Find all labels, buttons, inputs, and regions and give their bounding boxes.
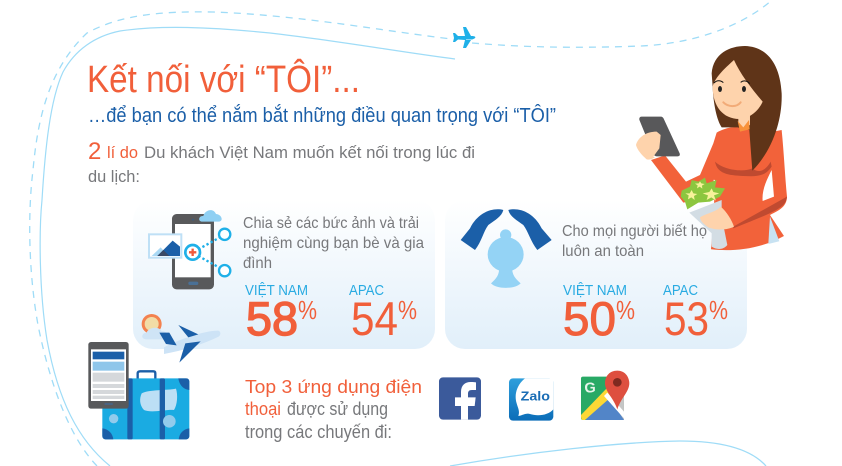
icon: suitcase with tablet (88, 342, 189, 439)
description: share photos: đình (243, 255, 272, 272)
intro text: two reasons: Du khách Việt Nam muốn kết nối trong lúc đi (144, 143, 475, 162)
phone (639, 117, 680, 156)
icon: phone with sharing nodes (149, 210, 230, 289)
dress body (699, 126, 787, 250)
panel: share photos (133, 200, 435, 363)
stat: APAC 53% (663, 282, 728, 345)
icon: Facebook (439, 377, 481, 420)
bouquet wrap (689, 200, 727, 249)
description: share photos: nghiệm cùng bạn bè và gia (243, 235, 424, 252)
hand holding bouquet (700, 207, 734, 229)
icon: airplane with sun and cloud (142, 314, 220, 363)
stat: Việt Nam 50%: VIỆT NAM (563, 282, 627, 299)
panel background (133, 200, 435, 349)
bouquet leaves (681, 178, 725, 209)
text: top 3 mobile apps: Top 3 ứng dụng điện (245, 377, 422, 397)
intro text: two reasons: du lịch: (88, 167, 140, 186)
face (713, 60, 763, 119)
description: safety: luôn an toàn (562, 243, 644, 260)
description: safety (562, 223, 707, 260)
stat: Việt Nam 58%: VIỆT NAM (245, 282, 308, 299)
icon: Zalo (509, 378, 553, 421)
icon: protective hands over person (461, 209, 552, 288)
illustration: woman in ao dai with phone and flowers (636, 46, 787, 250)
stat: Việt Nam 50% (563, 282, 635, 345)
stat: Việt Nam 50%: % (616, 295, 635, 325)
raised arm (651, 155, 715, 203)
neck (738, 115, 750, 128)
text: top 3 mobile apps: thoại (245, 399, 281, 419)
description: share photos (243, 215, 424, 272)
icon: Zalo: Zalo (521, 389, 550, 404)
intro text: two reasons: lí do (107, 143, 138, 162)
stat: APAC 54%: 54 (351, 292, 398, 345)
description: safety: Cho mọi người biết họ (562, 223, 707, 240)
panel background (445, 200, 747, 349)
stat: APAC 53%: APAC (663, 282, 698, 299)
stat: Việt Nam 58%: % (298, 295, 317, 325)
stat: Việt Nam 58%: 58 (246, 292, 298, 345)
dress lining (768, 217, 779, 244)
stat: APAC 53%: % (709, 295, 728, 325)
stat: Việt Nam 50%: 50 (563, 292, 616, 345)
icon: Google Maps: G (584, 381, 596, 397)
stat: APAC 54% (349, 282, 417, 345)
dress shadow (715, 162, 772, 176)
stat: APAC 54%: APAC (349, 282, 384, 299)
panel: let people know they are safe (445, 200, 747, 349)
subtitle: …để bạn có thể nắm bắt những điều quan trọng với “TÔI” (88, 104, 556, 127)
icon: Google Maps (581, 371, 629, 420)
white gap between arm and dress (763, 170, 774, 201)
stat: APAC 53%: 53 (664, 292, 709, 345)
flowers (685, 181, 719, 201)
title: Kết nối với “TÔI”... (87, 57, 360, 101)
hair (712, 46, 782, 171)
collar (738, 120, 750, 132)
intro text: two reasons: 2 (88, 138, 101, 165)
text: top 3 mobile apps: được sử dụng (287, 399, 388, 419)
icon: airplane on the flight path (453, 27, 475, 48)
text: top 3 mobile apps (245, 377, 422, 442)
stat: Việt Nam 58% (245, 282, 317, 345)
text: top 3 mobile apps: trong các chuyến đi: (245, 422, 392, 442)
intro text: two reasons (88, 138, 475, 186)
stat: APAC 54%: % (398, 295, 417, 325)
description: share photos: Chia sẻ các bức ảnh và trải (243, 215, 419, 232)
hand holding phone (636, 132, 661, 160)
facial features (714, 81, 750, 106)
